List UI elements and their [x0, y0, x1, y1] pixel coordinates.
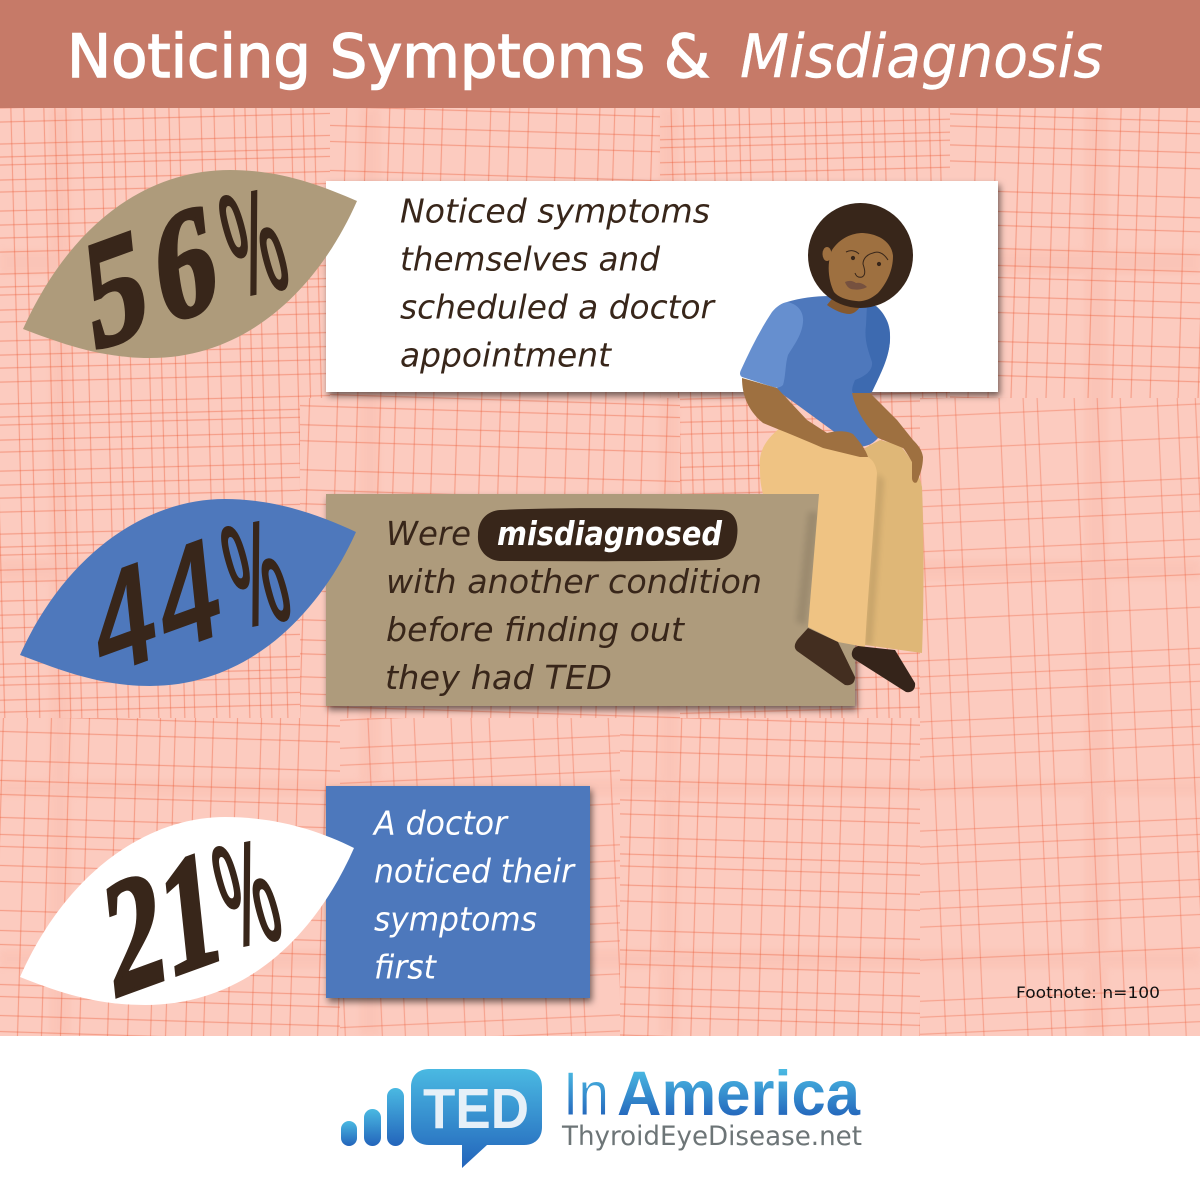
highlight pill: misdiagnosed: misdiagnosed — [497, 514, 722, 553]
logo: TED In America: America — [617, 1059, 861, 1129]
right arm — [852, 393, 923, 483]
back shoe — [852, 646, 915, 692]
panel: 21 percent statement: noticed their — [374, 852, 576, 890]
logo url: ThyroidEyeDisease.net — [561, 1121, 862, 1152]
leaf: 56%: 56 — [78, 164, 235, 385]
leaf: 56%: % — [205, 157, 303, 330]
ear — [822, 247, 832, 261]
logo bars — [341, 1088, 404, 1146]
logo wordmark: In — [563, 1060, 609, 1129]
panel: 56 percent statement: themselves and — [400, 240, 661, 278]
panel: 44 percent statement: Were — [386, 514, 471, 553]
panel: 56 percent statement: appointment — [400, 336, 612, 374]
panel: 44 percent statement — [326, 494, 855, 706]
panel: 56 percent statement: scheduled a doctor — [400, 288, 716, 326]
panel: 44 percent statement: before finding out — [386, 610, 685, 649]
light sleeve — [740, 302, 803, 388]
panel: 21 percent statement — [326, 786, 590, 998]
neck — [827, 295, 862, 314]
title banner — [0, 0, 1200, 108]
leaf: 21%: 21 — [97, 812, 227, 1035]
leaf: 44% — [20, 488, 356, 709]
dark sleeve — [852, 305, 890, 394]
leaf: 21%: % — [198, 808, 296, 981]
panel: 21 percent statement: first — [374, 948, 437, 986]
hair — [808, 203, 913, 308]
shirt — [777, 296, 890, 447]
panel: 21 percent statement: symptoms — [374, 900, 537, 938]
front leg and thigh — [760, 428, 877, 647]
logo speech bubble: TED — [423, 1077, 529, 1141]
footnote: Footnote: n=100 — [1016, 983, 1160, 1002]
back leg — [865, 440, 924, 653]
leaf: 56% — [23, 157, 357, 385]
panel: 44 percent statement: with another condition — [386, 562, 762, 601]
title: Noticing Symptoms & — [67, 22, 710, 92]
face — [829, 233, 893, 301]
leg shadow — [796, 473, 884, 646]
panel: 56 percent statement — [326, 181, 998, 392]
facial features — [845, 251, 888, 290]
panel: 44 percent statement: they had TED — [385, 658, 612, 697]
logo speech bubble — [411, 1069, 542, 1168]
leaf: 44%: % — [207, 488, 305, 661]
leaf: 21% — [20, 808, 354, 1035]
logo: TED In America — [341, 1059, 862, 1168]
background: woven fabric texture — [0, 108, 1200, 1036]
panel: 21 percent statement: A doctor — [372, 804, 509, 842]
footer band — [0, 1036, 1200, 1200]
left arm — [742, 378, 868, 457]
panel: 56 percent statement: Noticed symptoms — [400, 192, 710, 230]
illustration: seated woman — [740, 203, 924, 692]
front shoe — [795, 628, 855, 685]
highlight pill: misdiagnosed — [478, 508, 737, 561]
leaf: 44%: 44 — [87, 503, 232, 709]
title banner: Misdiagnosis — [740, 22, 1103, 92]
